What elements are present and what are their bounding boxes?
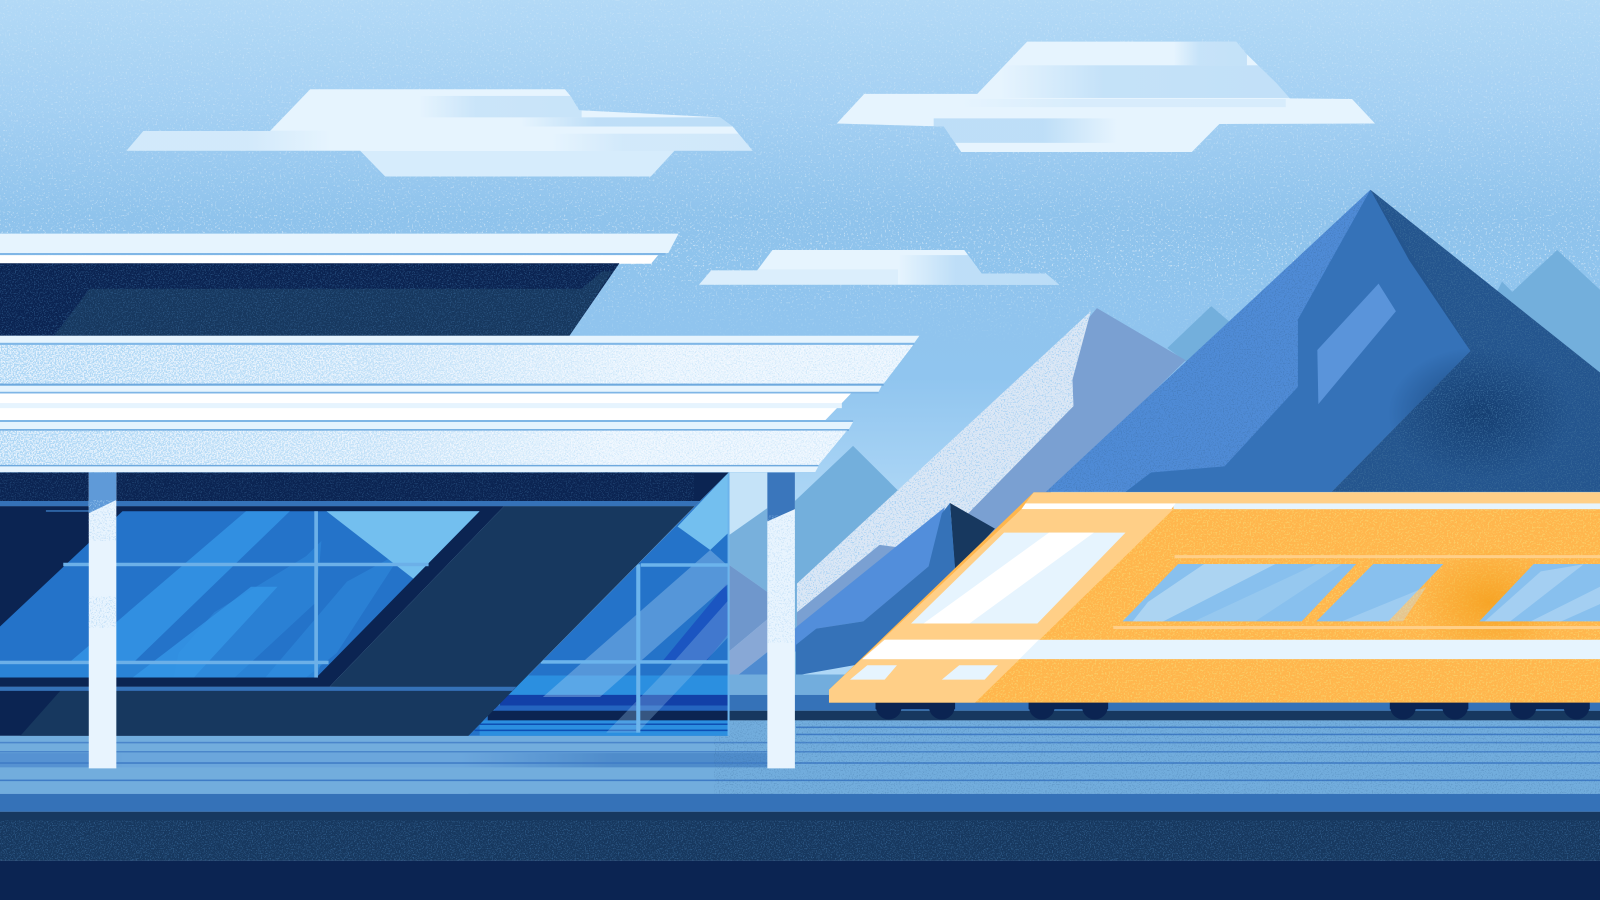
column right	[767, 472, 795, 768]
column left	[89, 472, 116, 768]
large window	[0, 510, 480, 678]
train headlight right	[942, 665, 998, 680]
train white band	[862, 640, 1600, 659]
upper roof slab	[0, 234, 679, 264]
train side window 3	[1479, 564, 1600, 621]
train body	[829, 492, 1600, 703]
sky speckle texture	[0, 0, 1600, 347]
train side lines	[1113, 555, 1600, 629]
mountain: main peak	[1046, 190, 1600, 492]
window light triangle	[327, 511, 480, 579]
lower wall grain	[0, 820, 1600, 861]
lower wall	[0, 812, 1600, 861]
train roof band	[1026, 492, 1600, 503]
train side window 2	[1316, 564, 1443, 621]
window mullions	[0, 511, 429, 678]
foreground base	[0, 861, 1600, 900]
train windscreen	[911, 533, 1126, 623]
train wheels	[876, 695, 1590, 719]
glass screen panel	[730, 472, 767, 674]
window thin top line	[46, 510, 89, 512]
train headlight left	[850, 665, 897, 680]
mountains: distant range	[767, 250, 1600, 679]
train roof stripe	[1021, 503, 1600, 509]
station building front	[0, 472, 729, 736]
mountain: small foreground peak	[755, 503, 995, 676]
cloud: upper left	[122, 89, 755, 177]
train side window 1	[1122, 564, 1356, 621]
glass window far right	[468, 472, 730, 736]
platform ground with stripes	[0, 720, 1600, 794]
train nose light panel	[829, 509, 1173, 703]
track bed: right side	[729, 674, 1600, 720]
cloud: small middle	[699, 250, 1061, 286]
cloud: upper right	[837, 41, 1375, 152]
building stripe lower	[0, 687, 516, 691]
mountain: snow-lit ridge	[796, 306, 1186, 638]
upper building block	[0, 263, 622, 336]
building stripe upper	[0, 501, 700, 506]
platform edge	[0, 794, 1600, 812]
train	[829, 492, 1600, 719]
train body texture	[974, 509, 1600, 703]
main roof canopy	[0, 336, 919, 472]
